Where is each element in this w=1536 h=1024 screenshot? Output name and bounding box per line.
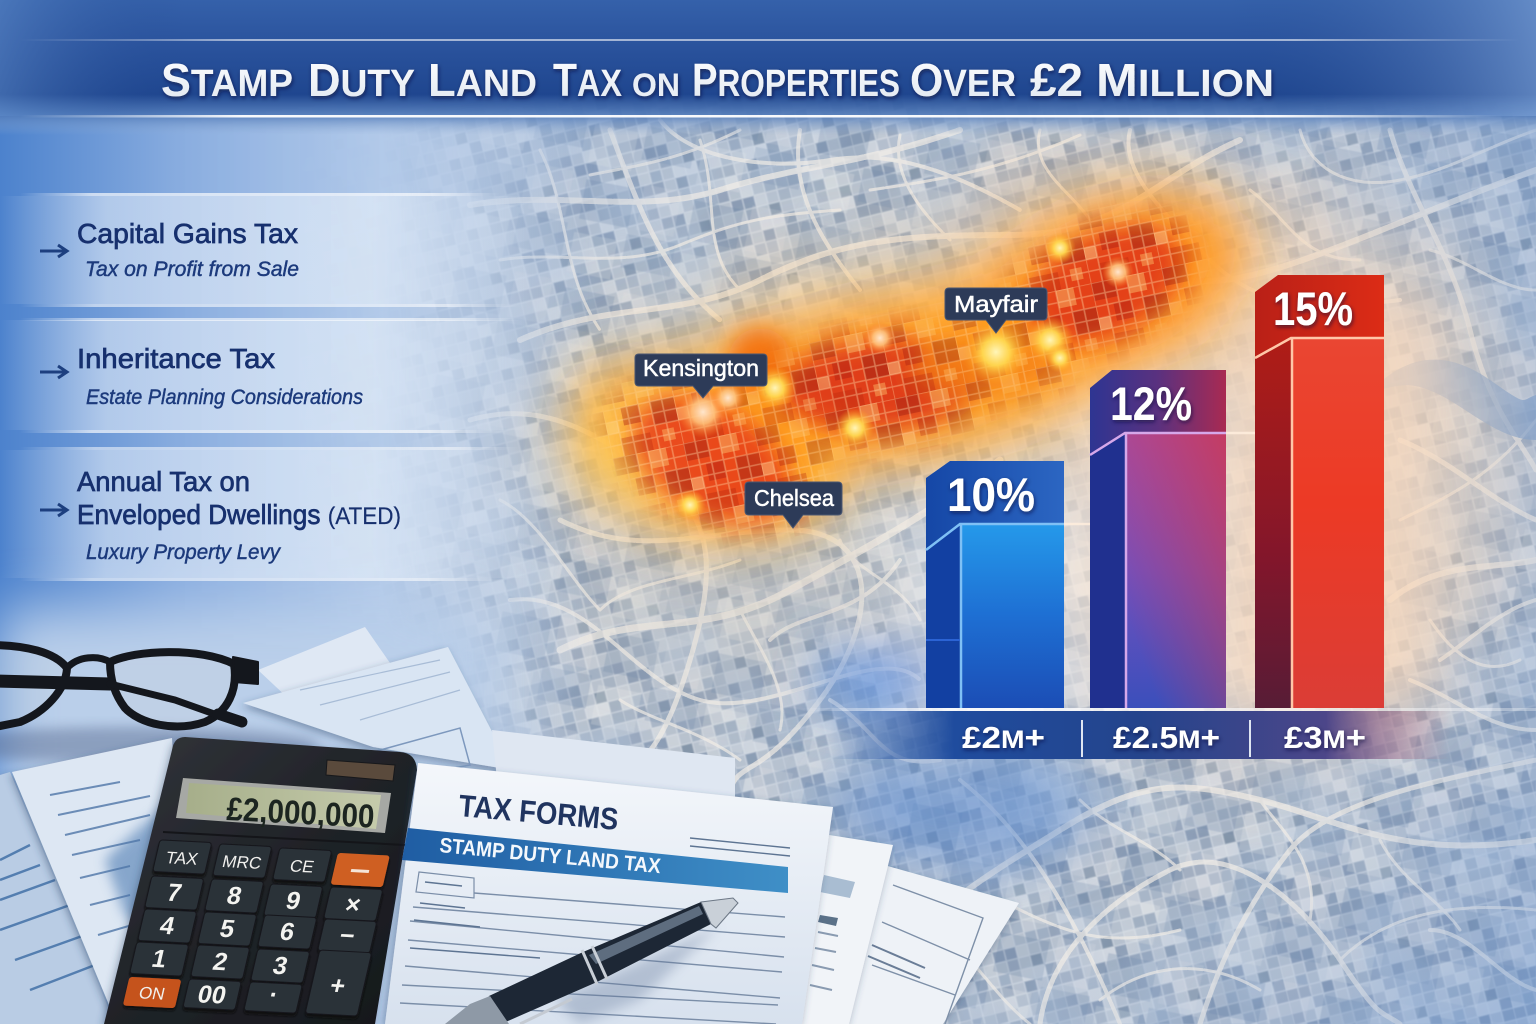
calculator keys: 00 bbox=[195, 981, 229, 1010]
title: STAMP bbox=[161, 54, 293, 106]
calculator keys: 2 bbox=[210, 948, 230, 976]
axis labels bbox=[830, 711, 1450, 759]
chart baseline bbox=[800, 708, 1536, 711]
bar: 15%: 15% bbox=[1273, 282, 1353, 335]
icon: glasses bbox=[0, 645, 258, 728]
form heading: TAX FORMS bbox=[457, 788, 620, 837]
calculator keys: 4 bbox=[157, 912, 177, 940]
icon: pen bbox=[445, 898, 738, 1024]
heatmap: prime central London bbox=[550, 164, 1270, 560]
map pin labels bbox=[635, 288, 1047, 528]
desk items bbox=[0, 627, 1019, 1024]
back papers bbox=[243, 627, 735, 800]
form band bbox=[402, 828, 788, 893]
calculator keys: 1 bbox=[149, 945, 169, 973]
bar: 10% bbox=[926, 461, 1064, 708]
calculator keys: 6 bbox=[277, 918, 297, 946]
title: LAND bbox=[428, 54, 537, 106]
tax list panel bbox=[0, 193, 530, 581]
calculator keys: 3 bbox=[270, 952, 290, 980]
item: inheritance tax: Estate Planning Considerations bbox=[86, 386, 363, 409]
calculator keys: + bbox=[327, 972, 348, 1000]
calculator keys: × bbox=[343, 891, 363, 919]
pin: Mayfair: Mayfair bbox=[954, 291, 1038, 317]
calculator keys: 7 bbox=[164, 879, 184, 907]
form fields bbox=[400, 838, 790, 1024]
item: annual tax on enveloped dwellings bbox=[0, 447, 530, 581]
calculator keys: 8 bbox=[224, 882, 244, 910]
calculator display: £2,000,000 bbox=[226, 790, 375, 835]
paper: tax form bbox=[385, 763, 833, 1024]
chart glow bbox=[820, 300, 1430, 710]
title: MILLION bbox=[1096, 54, 1274, 106]
title: ON bbox=[632, 67, 680, 103]
item: capital gains tax bbox=[0, 193, 530, 307]
bar connectors bbox=[1064, 433, 1255, 524]
glasses shadow bbox=[0, 727, 320, 763]
paper: right forms bbox=[790, 835, 1019, 1024]
item: annual tax on enveloped dwellings: Enveloped Dwellings (ATED) bbox=[77, 499, 401, 530]
map river bbox=[1370, 360, 1536, 440]
pin: Mayfair bbox=[945, 288, 1047, 333]
bar: 10%: 10% bbox=[947, 468, 1035, 521]
calculator keys: 5 bbox=[217, 915, 237, 943]
item: inheritance tax bbox=[0, 318, 530, 433]
title: £2 bbox=[1030, 54, 1083, 106]
calculator bbox=[104, 737, 417, 1024]
axis labels: £2.5M+ bbox=[1113, 720, 1220, 755]
calculator keys: · bbox=[266, 981, 281, 1009]
item: annual tax on enveloped dwellings: Annual Tax on bbox=[77, 466, 250, 497]
title bbox=[162, 64, 1274, 101]
item: inheritance tax: Inheritance Tax bbox=[77, 343, 275, 374]
paper: tax form: STAMP DUTY LAND TAX bbox=[439, 834, 662, 878]
item: capital gains tax: Capital Gains Tax bbox=[77, 218, 298, 249]
calculator keys bbox=[123, 840, 390, 1016]
calculator keys: MRC bbox=[220, 851, 264, 873]
title: DUTY bbox=[308, 54, 415, 106]
pin: Chelsea bbox=[745, 482, 842, 528]
calculator keys: CE bbox=[288, 856, 316, 876]
item: annual tax on enveloped dwellings: Luxury Property Levy bbox=[86, 541, 281, 564]
calculator keys: 9 bbox=[283, 887, 303, 915]
bar: 12%: 12% bbox=[1110, 377, 1192, 430]
bar: 12% bbox=[1090, 370, 1226, 708]
calculator keys: − bbox=[337, 922, 358, 950]
bar chart: SDLT rates bbox=[800, 275, 1536, 759]
title: OVER bbox=[910, 54, 1016, 106]
calculator keys: ON bbox=[137, 983, 167, 1004]
pin: Kensington: Kensington bbox=[643, 355, 759, 381]
paper: left stack bbox=[0, 738, 190, 1024]
title: TAX bbox=[553, 54, 623, 106]
heat hotspots bbox=[674, 232, 1134, 521]
title banner bbox=[0, 0, 1536, 135]
solar panel bbox=[326, 760, 395, 781]
axis labels: £2M+ bbox=[962, 720, 1045, 755]
pin: Kensington bbox=[635, 354, 767, 398]
calculator display bbox=[176, 778, 391, 835]
bar: 15% bbox=[1255, 275, 1384, 708]
axis labels: £3M+ bbox=[1284, 720, 1366, 755]
map background bbox=[442, 118, 1536, 1024]
calculator keys: TAX bbox=[164, 847, 201, 869]
pin: Chelsea: Chelsea bbox=[754, 485, 834, 511]
title: PROPERTIES bbox=[692, 54, 900, 106]
item: capital gains tax: Tax on Profit from Sale bbox=[85, 258, 299, 281]
left panel backdrop bbox=[0, 0, 590, 1024]
